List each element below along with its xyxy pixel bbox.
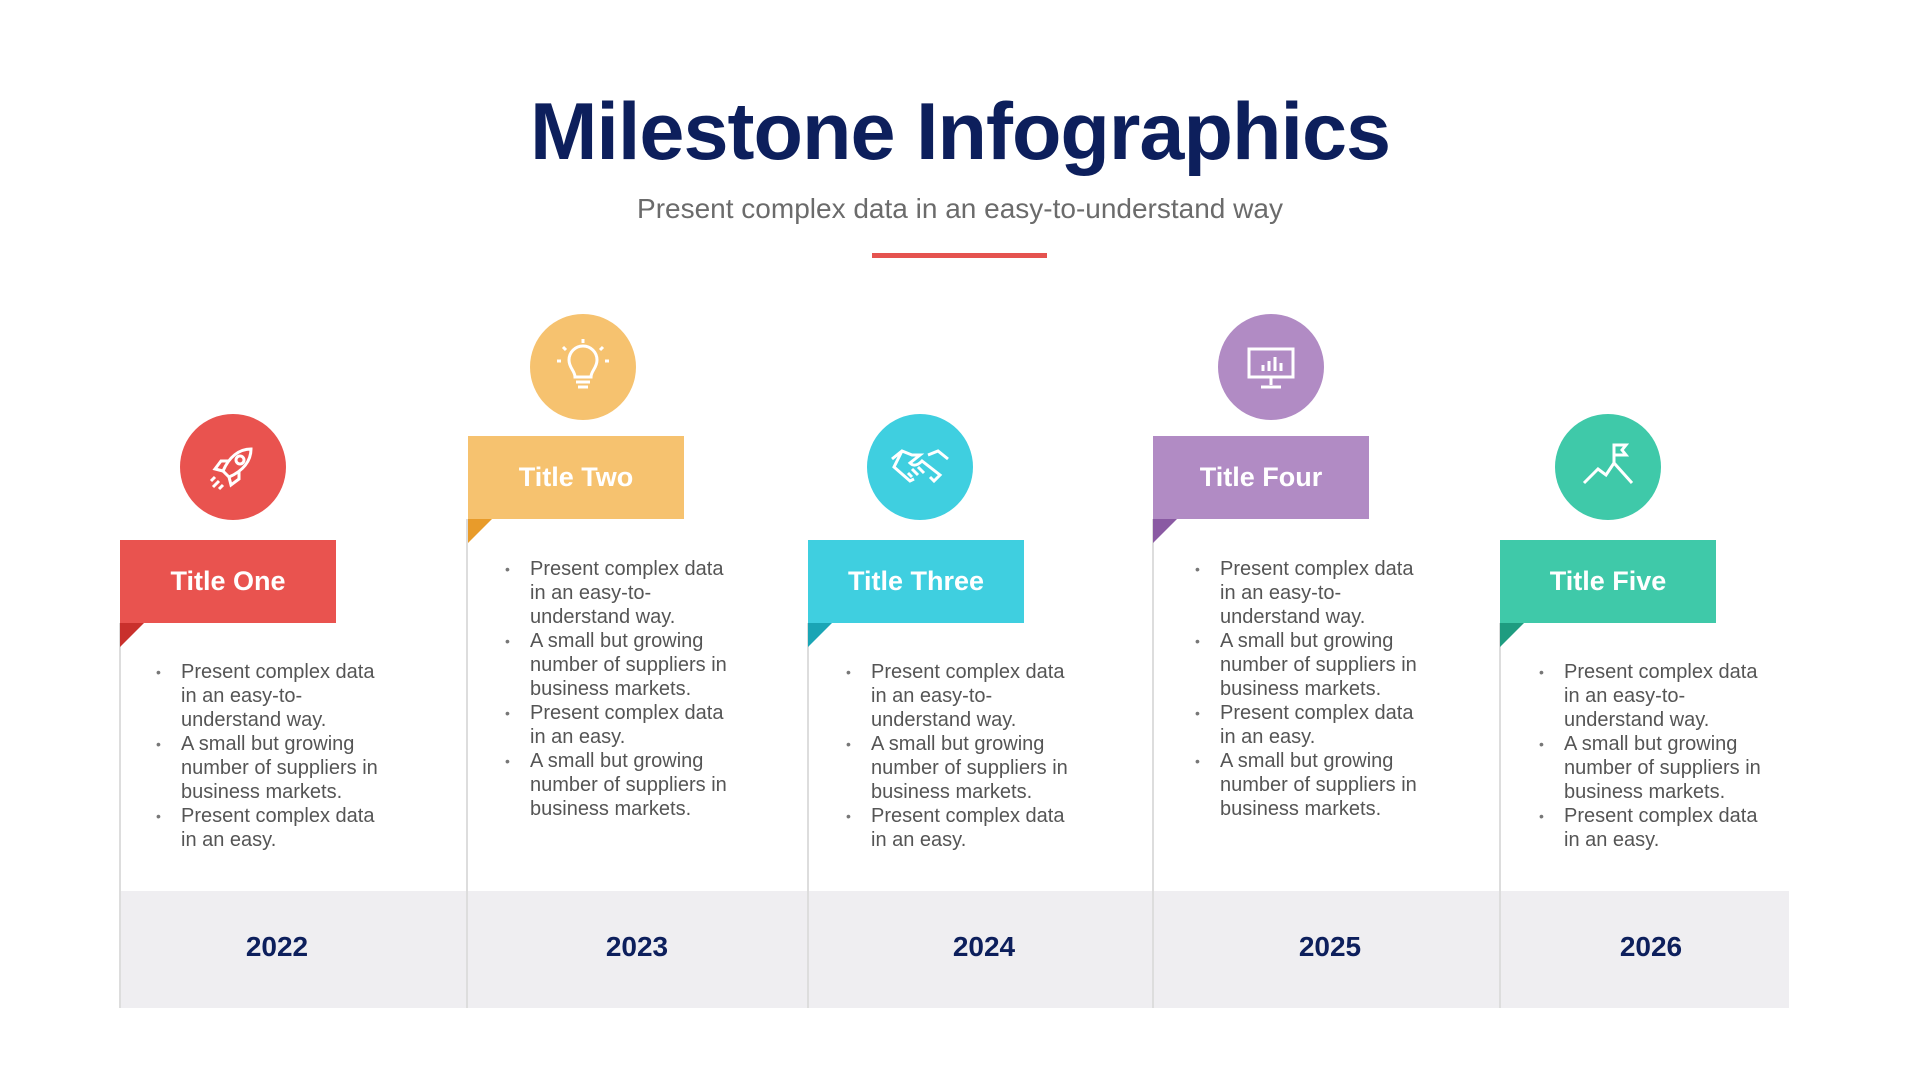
icon: flag on mountain <box>1555 414 1661 520</box>
bullets: understand way. <box>1564 709 1709 731</box>
bullets: number of suppliers in <box>181 757 378 779</box>
title box <box>120 540 336 623</box>
title box <box>1500 540 1716 623</box>
bullets: Present complex data <box>871 805 1064 827</box>
bullets: Present complex data <box>1220 558 1413 580</box>
bullets: business markets. <box>1220 678 1381 700</box>
title box: Title One <box>170 566 286 596</box>
title: Milestone Infographics <box>530 87 1390 177</box>
bullets: number of suppliers in <box>1564 757 1761 779</box>
bullets: in an easy-to- <box>1220 582 1341 604</box>
column 2 <box>468 314 727 820</box>
title box <box>808 540 1024 623</box>
bullets: in an easy. <box>1220 726 1315 748</box>
bullets: business markets. <box>530 798 691 820</box>
column 5 <box>1500 414 1761 851</box>
bullets: in an easy. <box>181 829 276 851</box>
bullets: in an easy. <box>871 829 966 851</box>
bullets <box>506 558 727 820</box>
bullets: Present complex data <box>181 805 374 827</box>
bullets: number of suppliers in <box>530 774 727 796</box>
bullets <box>1196 558 1417 820</box>
text: 2023 <box>606 931 668 962</box>
bullets: in an easy. <box>1564 829 1659 851</box>
bullets: Present complex data <box>1564 805 1757 827</box>
bullets: A small but growing <box>1220 630 1393 652</box>
column 4 <box>1153 314 1417 820</box>
bullets: number of suppliers in <box>1220 774 1417 796</box>
bullets: business markets. <box>1564 781 1725 803</box>
bullets: in an easy-to- <box>871 685 992 707</box>
accent line <box>872 253 1047 258</box>
bullets: business markets. <box>1220 798 1381 820</box>
bullets: Present complex data <box>1564 661 1757 683</box>
bullets: A small but growing <box>1564 733 1737 755</box>
column 3 <box>808 414 1068 851</box>
title box: Title Three <box>848 566 984 596</box>
bullets: number of suppliers in <box>871 757 1068 779</box>
title box <box>468 436 684 519</box>
bullets: business markets. <box>181 781 342 803</box>
title box <box>1153 436 1369 519</box>
bullets: understand way. <box>181 709 326 731</box>
bullets: A small but growing <box>530 750 703 772</box>
subtitle: Present complex data in an easy-to-understand way <box>637 193 1283 224</box>
bullets: Present complex data <box>871 661 1064 683</box>
bullets: A small but growing <box>871 733 1044 755</box>
bullets <box>846 661 1068 851</box>
text: 2025 <box>1299 931 1361 962</box>
icon: rocket <box>180 414 286 520</box>
text: 2026 <box>1620 931 1682 962</box>
icon: monitor chart <box>1218 314 1324 420</box>
bullets: number of suppliers in <box>1220 654 1417 676</box>
bullets <box>156 661 378 851</box>
title box: Title Five <box>1550 566 1666 596</box>
bullets: A small but growing <box>1220 750 1393 772</box>
year band <box>119 891 1789 1008</box>
bullets: understand way. <box>871 709 1016 731</box>
bullets: business markets. <box>530 678 691 700</box>
icon: bulb <box>530 314 636 420</box>
bullets: understand way. <box>1220 606 1365 628</box>
icon: handshake <box>867 414 973 520</box>
bullets: A small but growing <box>530 630 703 652</box>
bullets: business markets. <box>871 781 1032 803</box>
bullets: in an easy-to- <box>530 582 651 604</box>
bullets <box>1540 661 1761 851</box>
bullets: Present complex data <box>1220 702 1413 724</box>
text: 2024 <box>953 931 1015 962</box>
bullets: Present complex data <box>530 558 723 580</box>
bullets: in an easy. <box>530 726 625 748</box>
bullets: Present complex data <box>181 661 374 683</box>
years: 2022 <box>246 931 308 962</box>
bullets: A small but growing <box>181 733 354 755</box>
bullets: in an easy-to- <box>181 685 302 707</box>
bullets: number of suppliers in <box>530 654 727 676</box>
bullets: in an easy-to- <box>1564 685 1685 707</box>
title box: Title Four <box>1200 462 1322 492</box>
bullets: Present complex data <box>530 702 723 724</box>
column 1 <box>120 414 378 851</box>
title box: Title Two <box>519 462 633 492</box>
bullets: understand way. <box>530 606 675 628</box>
